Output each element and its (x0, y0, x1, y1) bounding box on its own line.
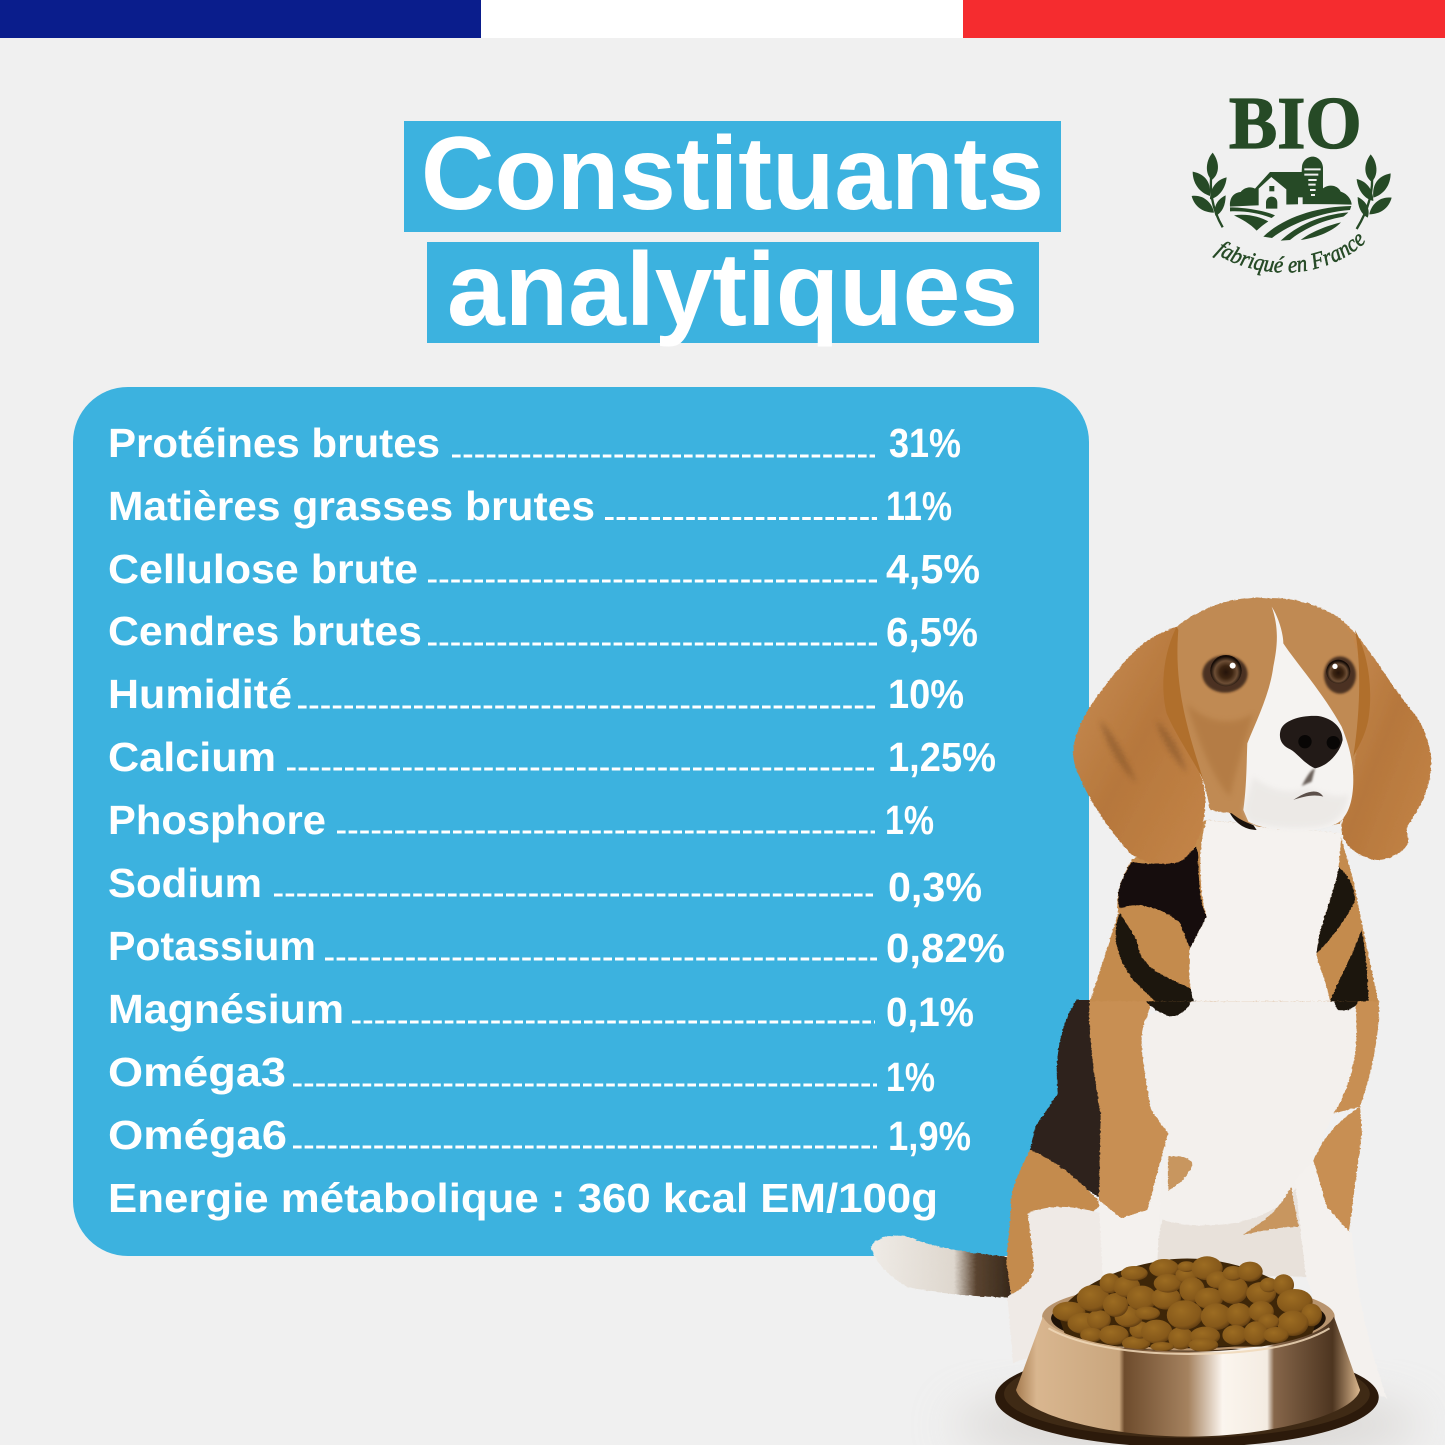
row: Cellulose brute: 4,5% (886, 546, 980, 592)
row: Sodium: 0,3% (888, 864, 982, 910)
title: analytiques (447, 232, 1018, 348)
row: Phosphore: Phosphore (108, 797, 326, 843)
row: Calcium: Calcium (108, 734, 276, 780)
title (404, 116, 1061, 348)
row: Potassium: 0,82% (886, 925, 1005, 971)
logo: BIO fabriqué en France: BIO (1229, 83, 1362, 165)
row: Oméga6: 1,9% (888, 1113, 971, 1159)
row: Cendres brutes (108, 608, 978, 655)
row: Humidité: Humidité (108, 671, 292, 717)
dog face (1163, 597, 1370, 831)
row: Calcium: 1,25% (888, 734, 996, 780)
row: Potassium: Potassium (108, 923, 316, 969)
row: Cendres brutes: Cendres brutes (108, 608, 422, 654)
illustration: beagle with food bowl (871, 597, 1431, 1445)
dog eyes (1202, 655, 1356, 694)
logo: BIO fabriqué en France (1192, 83, 1392, 276)
row: Cendres brutes: 6,5% (886, 609, 978, 655)
dog nose (1280, 716, 1343, 768)
logo: BIO fabriqué en France: fabriqué en France (1212, 234, 1365, 276)
dog ears (1073, 617, 1431, 864)
dog chest and collar markings (1090, 820, 1378, 1001)
row: Magnésium (108, 986, 974, 1035)
row: Oméga3 (108, 1049, 935, 1100)
row: Magnésium: Magnésium (108, 986, 344, 1032)
dog lower body and tail (871, 1000, 1387, 1398)
row: Oméga3: Oméga3 (108, 1049, 286, 1095)
row: Phosphore: 1% (885, 797, 934, 843)
row: Protéines brutes (108, 420, 961, 466)
bowl body (1016, 1317, 1360, 1437)
row: Humidité: 10% (888, 671, 964, 717)
row: Phosphore (108, 797, 934, 843)
kibble mound (1058, 1259, 1319, 1347)
row: Oméga6 (108, 1112, 971, 1159)
row: Matières grasses brutes (108, 483, 952, 529)
row: Cellulose brute (108, 546, 980, 592)
title: Constituants (421, 116, 1044, 232)
row: Protéines brutes: 31% (889, 420, 961, 466)
French flag band (0, 0, 1445, 38)
row: Matières grasses brutes: 11% (886, 483, 952, 529)
row: Matières grasses brutes: Matières grasses brutes (108, 483, 595, 529)
row: Energie métabolique: Energie métabolique : 360 kcal EM/100g (108, 1175, 938, 1221)
floor shadow (953, 1395, 1423, 1445)
row: Oméga3: 1% (886, 1054, 935, 1100)
food bowl with kibble (995, 1256, 1379, 1445)
row: Calcium (108, 734, 996, 780)
row: Sodium: Sodium (108, 860, 262, 906)
kibble (1053, 1256, 1322, 1352)
row: Magnésium: 0,1% (886, 989, 974, 1035)
row: Protéines brutes: Protéines brutes (108, 420, 440, 466)
row: Oméga6: Oméga6 (108, 1112, 287, 1158)
row: Sodium (108, 860, 982, 910)
row: Cellulose brute: Cellulose brute (108, 546, 418, 592)
row: Humidité (108, 671, 964, 717)
row: Potassium (108, 923, 1005, 971)
panel: analytical constituents (73, 387, 1089, 1256)
dog head and ears (1073, 597, 1431, 864)
